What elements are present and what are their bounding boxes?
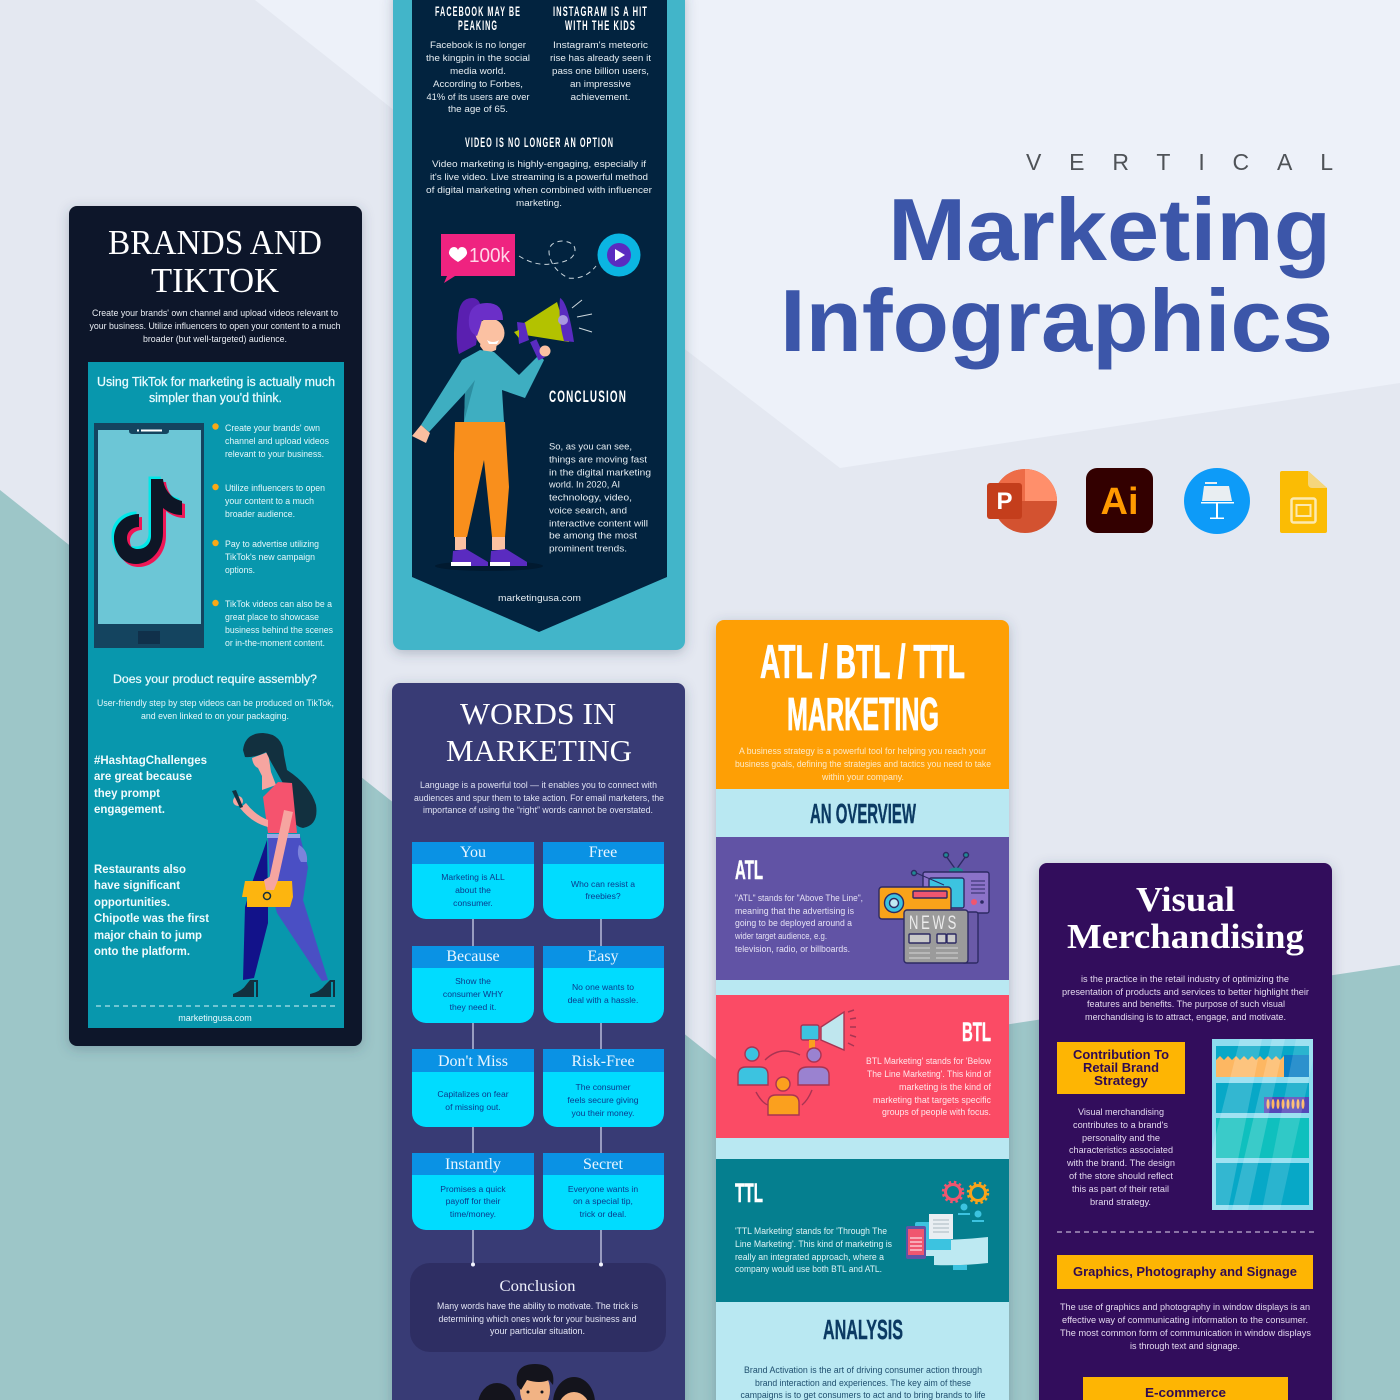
panel: BTL: marketing that targets specific [873,1095,991,1105]
section: video: marketing. [516,198,562,208]
card: You: about the [455,885,491,895]
panel: TTL: Line Marketing'. This kind of marketing is [735,1239,892,1249]
yellow banner: e-commerce: E-commerce [1145,1385,1226,1400]
card: Instantly: time/money. [450,1209,496,1219]
orange header: A business strategy is a powerful tool for helping you reach your [739,746,986,756]
section: Instagram: WITH THE KIDS [565,17,636,33]
restaurants text: opportunities. [94,895,170,909]
yellow banner: graphics: Graphics, Photography and Signage [1073,1264,1297,1279]
hashtag text: #HashtagChallenges [94,753,207,767]
conclusion [548,387,651,554]
icon: PowerPoint [987,469,1057,533]
card: Instantly: Promises a quick [440,1184,506,1194]
card: Don't Miss: of missing out. [445,1102,501,1112]
intro text: Language is a powerful tool — it enables you to connect with [420,780,657,790]
panel: TTL [716,1159,1009,1302]
icon: likes speech bubble: 100k [469,245,511,267]
intro text: broader (but well-targeted) audience. [143,334,287,344]
section: Facebook: PEAKING [458,17,498,33]
restaurants text [94,862,209,958]
section: video: Video marketing is highly-engaging, especially if [432,159,647,169]
panel: BTL: marketing is the kind of [899,1082,991,1092]
conclusion: in the digital marketing [549,468,651,478]
card: You: consumer. [453,898,493,908]
bullet list: TikTok videos can also be a [225,599,332,609]
intro text: your business. Utilize influencers to open your content to a much [90,321,340,331]
analysis section [740,1314,986,1400]
bullet list: channel and upload videos [225,436,329,446]
assembly section: Does your product require assembly? [113,674,317,686]
heading [108,223,322,300]
panel: BTL [716,995,1009,1138]
card: Easy: deal with a hassle. [568,995,638,1005]
body text [1066,1107,1175,1207]
card: Don't Miss [412,1049,534,1127]
heading: an overview: AN OVERVIEW [810,798,916,829]
conclusion: technology, video, [549,492,632,502]
hashtag text: they prompt [94,786,160,800]
conclusion: things are moving fast [549,454,648,464]
body text: personality and the [1082,1133,1160,1143]
panel: Words in Marketing [392,683,685,1400]
panel: ATL [716,837,1009,980]
card: Easy: No one wants to [572,982,634,992]
body text: Visual merchandising [1078,1107,1164,1117]
card: Secret: on a special tip, [573,1196,633,1206]
yellow box: contribution [1057,1042,1185,1094]
conclusion box: Conclusion [500,1278,576,1295]
intro text: audiences and spur them to take action. For email marketers, the [414,793,664,803]
panel: TTL: company would use both BTL and ATL. [735,1264,882,1274]
icon: media tv radio news [879,852,989,963]
illustration: store shelf [1212,1039,1313,1210]
section: video: of digital marketing when combined with influencer [426,185,652,195]
icon: gears and devices [906,1182,988,1270]
graphics text: The most common form of communication in window displays [1060,1328,1312,1338]
card: Secret: Secret [583,1156,624,1173]
restaurants text: Chipotle was the first [94,911,209,925]
label: vertical: VERTICAL [1026,149,1333,175]
panel: ATL: "ATL" stands for "Above The Line", [735,893,863,903]
bullet list: Pay to advertise utilizing [225,539,319,549]
orange header: MARKETING [787,688,939,740]
panel: TTL: really an integrated approach, where a [735,1252,884,1262]
conclusion box: your particular situation. [490,1326,585,1336]
panel: ATL BTL TTL marketing [716,620,1009,1400]
yellow box: contribution: Retail Brand [1083,1060,1159,1075]
panel: BTL: BTL Marketing' stands for 'Below [866,1056,991,1066]
conclusion: interactive content will [549,518,648,528]
illustration: people [478,1364,595,1400]
bullet list: relevant to your business. [225,449,324,459]
heading: Merchandising [1067,917,1305,956]
title line: Infographics: Infographics [780,271,1333,370]
graphics text: is through text and signage. [1130,1341,1240,1351]
yellow box: contribution: Strategy [1094,1073,1149,1088]
conclusion: prominent trends. [549,544,627,554]
card: Because [412,946,534,1023]
card: Free: freebies? [585,891,621,901]
section: Facebook: Facebook is no longer [430,40,526,50]
bullet list: your content to a much [225,496,314,506]
subheading: Using TikTok for marketing is actually much [97,375,335,389]
section: Facebook: media world. [450,66,506,76]
section: Instagram: rise has already seen it [550,53,652,63]
orange header: business goals, defining the strategies and tactics you need to take [735,759,991,769]
heading: TIKTOK [151,261,279,300]
panel: BTL: groups of people with focus. [882,1107,991,1117]
assembly section: User-friendly step by step videos can be produced on TikTok, [97,698,334,708]
software icons [987,468,1327,534]
bullet list: great place to showcase [225,612,319,622]
panel: Visual Merchandising [1039,863,1332,1400]
dashed flight path [519,241,596,278]
section: Instagram: INSTAGRAM IS A HIT [553,3,648,19]
restaurants text: major chain to jump [94,928,202,942]
panel: ATL: television, radio, or billboards. [735,944,850,954]
card: Because: they need it. [450,1002,496,1012]
hashtag text: are great because [94,769,192,783]
bullet list: Utilize influencers to open [225,483,325,493]
section: Instagram [550,3,652,102]
phone with TikTok logo [94,423,204,648]
heading: WORDS IN [460,696,616,731]
section: Instagram: Instagram's meteoric [553,40,649,50]
body text: characteristics associated [1069,1145,1173,1155]
icon: Google Slides [1280,471,1327,533]
footer url: marketingusa.com [498,593,581,604]
section: Facebook [426,3,530,114]
card: Don't Miss: Capitalizes on fear [437,1089,509,1099]
body text: contributes to a brand's [1073,1120,1169,1130]
restaurants text: Restaurants also [94,862,186,876]
bullet list: or in-the-moment content. [225,638,325,648]
orange header: ATL / BTL / TTL [760,635,965,688]
section: Facebook: 41% of its users are over [426,92,530,102]
analysis section: ANALYSIS [823,1314,903,1345]
orange header: within your company. [821,772,904,782]
section: video [426,134,652,208]
intro text: presentation of products and services to better highlight their [1062,987,1309,997]
card: Risk-Free [543,1049,664,1127]
heading: MARKETING [446,733,632,768]
panel: ATL: meaning that the advertising is [735,906,854,916]
card: Free: Who can resist a [571,879,635,889]
yellow box: contribution: Contribution To [1073,1047,1169,1062]
yellow banner: e-commerce [1083,1377,1288,1400]
conclusion: be among the most [549,530,638,540]
analysis section: brand interaction and experiences. The key aim of these [755,1378,971,1388]
card: Secret: Everyone wants in [568,1184,638,1194]
bullet list: Create your brands' own [225,423,320,433]
assembly section [97,674,334,721]
heading: Vertical Marketing Infographics [780,149,1333,370]
card: Free [543,842,664,919]
card: Instantly: payoff for their [446,1196,501,1206]
restaurants text: have significant [94,878,180,892]
intro text: is the practice in the retail industry of optimizing the [1081,974,1289,984]
bullet list: business behind the scenes [225,625,333,635]
illustration: woman walking with phone [232,733,335,997]
yellow banner: graphics [1057,1255,1313,1289]
icon: likes speech bubble [441,234,515,283]
illustration: woman with megaphone [412,298,592,571]
panel: ATL: going to be deployed around a [735,918,852,928]
title line: Marketing: Marketing [888,180,1331,279]
card: Risk-Free: you their money. [572,1108,634,1118]
icon: Illustrator: Ai [1100,481,1138,523]
body text: this as part of their retail [1072,1184,1169,1194]
card: Easy [543,946,664,1023]
section: video: VIDEO IS NO LONGER AN OPTION [465,134,614,150]
section: Facebook: the kingpin in the social [426,53,530,63]
hashtag text [94,753,207,816]
bullet list: broader audience. [225,509,295,519]
card: Risk-Free: feels secure giving [567,1095,639,1105]
intro text [414,780,664,815]
section: Instagram: an impressive [570,79,631,89]
section: video: it's live video. Live streaming is a powerful method [430,172,648,182]
card: Secret [543,1153,664,1230]
intro text [1062,974,1309,1022]
dashed divider [1057,1231,1314,1233]
conclusion: CONCLUSION [549,387,627,406]
heading [1067,880,1305,956]
heading [446,696,632,768]
icon: media tv radio news: NEWS [909,913,959,934]
card: Risk-Free: The consumer [576,1082,631,1092]
card: Free: Free [589,844,617,861]
section: Facebook: According to Forbes, [433,79,523,89]
intro text: merchandising is to attract, engage, and motivate. [1085,1012,1286,1022]
body text: with the brand. The design [1066,1158,1175,1168]
graphics text: effective way of communicating information to the consumer. [1062,1315,1308,1325]
icon: Illustrator [1086,468,1153,533]
heading: BRANDS AND [108,223,322,262]
card: Instantly [412,1153,534,1230]
card: Secret: trick or deal. [580,1209,626,1219]
section: Facebook: the age of 65. [448,104,508,114]
subheading [97,375,335,405]
restaurants text: onto the platform. [94,944,190,958]
icon: Keynote [1184,468,1250,534]
bullet list [212,423,333,648]
subheading: simpler than you'd think. [149,391,282,405]
card: Risk-Free: Risk-Free [571,1053,635,1070]
card: Because: Show the [455,976,491,986]
section: Instagram: achievement. [570,92,630,102]
analysis section: Brand Activation is the art of driving consumer action through [744,1365,982,1375]
section: Instagram: pass one billion users, [552,66,649,76]
footer: marketingusa.com [178,1013,252,1023]
body text: of the store should reflect [1069,1171,1174,1181]
icon: play button [598,234,640,276]
icon: PowerPoint: P [996,488,1013,515]
heading: Visual [1136,880,1235,919]
analysis section: campaigns is to get consumers to act and to bring brands to life [740,1390,986,1400]
icon: megaphone and people [738,1010,856,1115]
body text: brand strategy. [1090,1197,1151,1207]
conclusion box: Many words have the ability to motivate. The trick is [437,1301,638,1311]
conclusion: world. In 2020, AI [548,480,620,490]
conclusion box: determining which ones work for your business and [438,1314,636,1324]
panel: BTL: The Line Marketing'. This kind of [867,1069,991,1079]
bullet list: TikTok's new campaign [225,552,315,562]
assembly section: and even linked to on your packaging. [141,711,289,721]
section: Facebook: FACEBOOK MAY BE [435,3,521,19]
card: Don't Miss: Don't Miss [438,1053,508,1070]
intro text: features and benefits. The purpose of such visual [1087,999,1285,1009]
panel: BTL: BTL [962,1017,991,1047]
card: Because: Because [446,948,500,965]
conclusion: So, as you can see, [549,442,632,452]
panel: ATL: wider target audience, e.g. [734,931,827,941]
connectors [473,919,601,1264]
orange header [716,620,1009,789]
card: You: Marketing is ALL [441,872,505,882]
bullet list: options. [225,565,255,575]
hashtag text: engagement. [94,802,165,816]
intro text [90,308,340,344]
graphics text: The use of graphics and photography in window displays is an [1060,1302,1310,1312]
panel: TTL: TTL [735,1178,763,1208]
intro text: Create your brands' own channel and upload videos relevant to [92,308,338,318]
graphics text [1060,1302,1312,1351]
card: Easy: Easy [587,948,619,965]
card: Because: consumer WHY [443,989,503,999]
conclusion box [410,1262,666,1352]
panel: teal infographic with conclusion [393,0,685,650]
card: You [412,842,534,919]
panel: TTL: 'TTL Marketing' stands for 'Through The [735,1226,887,1236]
card: You: You [460,844,486,861]
intro text: importance of using the “right” words cannot be overstated. [423,805,653,815]
panel: Brands and TikTok [69,206,362,1046]
card: Instantly: Instantly [445,1156,501,1173]
conclusion: voice search, and [549,506,627,516]
panel: ATL: ATL [735,855,763,885]
